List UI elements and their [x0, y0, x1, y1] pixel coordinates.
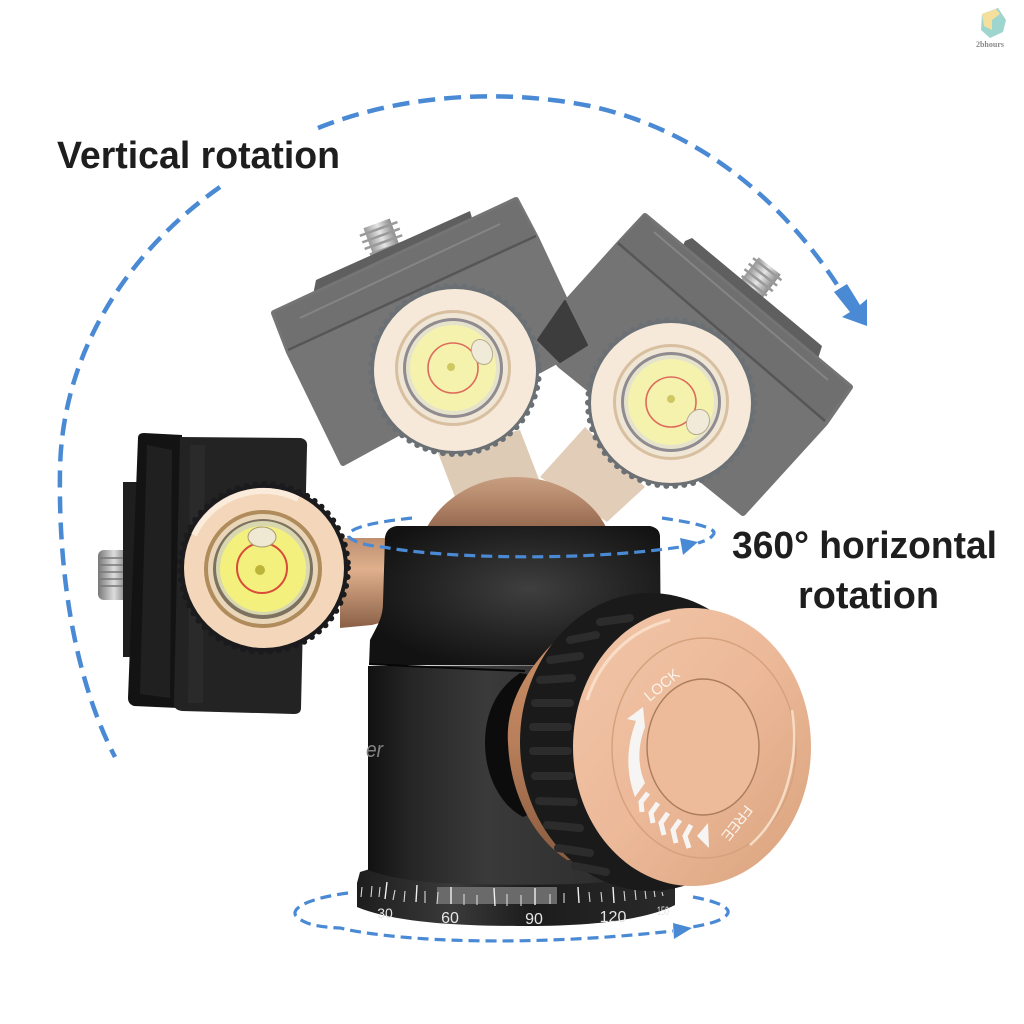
scale numbers: 150	[657, 904, 669, 918]
light band	[437, 887, 557, 904]
rail	[618, 216, 850, 421]
faded arm left	[437, 430, 540, 497]
clamp body	[274, 200, 586, 463]
label free: FREE	[718, 802, 756, 844]
heading: vertical rotation: Vertical rotation	[57, 135, 340, 177]
main block	[174, 437, 307, 714]
logo: 2bhours	[976, 8, 1006, 49]
rubber grip	[520, 593, 780, 891]
heading: 360 horizontal rotation: 360° horizontal	[732, 525, 997, 567]
arrow: vertical rotation arc right	[318, 96, 867, 326]
scale numbers: 90	[525, 911, 543, 928]
ball	[427, 477, 606, 527]
top plate	[313, 211, 474, 295]
lower body	[368, 666, 661, 885]
faded level A	[371, 286, 539, 454]
scale numbers: 30	[377, 905, 393, 921]
tripod head body	[366, 526, 661, 885]
short ticks	[361, 886, 663, 906]
top plate	[680, 238, 822, 362]
screw	[358, 216, 409, 268]
copper cap	[573, 608, 811, 886]
copper strip	[508, 618, 600, 860]
brand text fragment: er	[366, 737, 384, 762]
scale numbers: 120	[600, 909, 626, 926]
left plate	[128, 433, 182, 708]
scale numbers	[377, 904, 669, 928]
overlap wedge	[538, 301, 587, 362]
clamp body	[539, 216, 850, 513]
main arm	[340, 538, 390, 628]
horizontal rotation arrow: head	[349, 518, 714, 557]
faded clamp: rotated position right	[539, 216, 850, 513]
screw	[98, 550, 130, 600]
heading: 360 horizontal rotation	[732, 525, 997, 617]
screw	[732, 255, 784, 307]
long ticks	[385, 882, 614, 906]
locking knob	[485, 593, 811, 891]
upper body	[369, 526, 661, 666]
rail	[274, 200, 536, 350]
main level	[180, 484, 348, 652]
back plate	[123, 482, 137, 657]
faded clamp: rotated position left	[274, 200, 586, 463]
label lock: LOCK	[641, 666, 683, 705]
heading: 360 horizontal rotation: rotation	[798, 575, 939, 617]
faded level B	[588, 320, 754, 486]
logo: 2bhours: 2bhours	[976, 40, 1004, 49]
base ring	[357, 860, 675, 928]
hub	[485, 673, 560, 817]
grip ribs	[533, 618, 630, 872]
scale numbers: 60	[441, 910, 459, 927]
icon: direction arrow	[627, 707, 709, 848]
base rotation arrow	[295, 893, 728, 941]
main clamp	[98, 433, 307, 714]
arrow: vertical rotation arc left	[60, 187, 220, 757]
faded arm right	[540, 427, 645, 522]
